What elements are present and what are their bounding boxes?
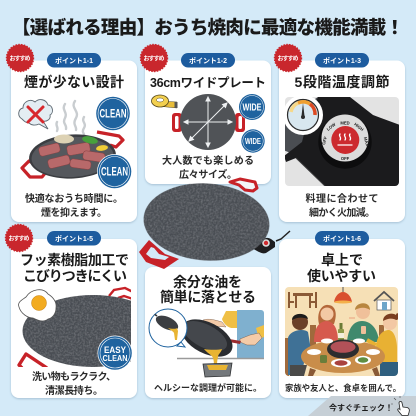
icon: tape measure [152, 95, 178, 108]
heading: temperature: 5段階温度調節 [294, 74, 390, 90]
label: point 1-1 pill [47, 53, 101, 68]
panel: drain excess oil [145, 267, 271, 398]
panel: point 1-3 temperature [279, 60, 405, 222]
body text [32, 370, 116, 397]
heading: drain oil [160, 274, 256, 305]
panel: point 1-2 wide plate [145, 60, 271, 184]
icon: temperature gauge [283, 95, 323, 135]
label: point 1-5 pill [47, 231, 101, 246]
label: point 1-6 pill: ポイント1-6 [323, 235, 361, 243]
chairs behind people [285, 325, 384, 376]
illustration: central grill plate [139, 179, 290, 269]
illustration: people around table [285, 287, 400, 376]
body text [306, 192, 378, 219]
panel: point 1-6 tabletop [279, 239, 405, 398]
icon: easy clean badge: CLEAN [102, 353, 128, 363]
body text: 広々サイズ。 [179, 168, 237, 181]
badge: recommended 1: おすすめ [10, 56, 30, 62]
icon: wide badge bottom: WIDE [245, 136, 261, 146]
panel: point 1-1 low smoke [11, 60, 137, 222]
label: point 1-3 pill: ポイント1-3 [323, 57, 361, 65]
body text: 快適なおうち時間に。 [25, 192, 123, 205]
icon: steam [56, 101, 85, 136]
body text: 煙を抑えます。 [41, 206, 107, 219]
label: point 1-1 pill: ポイント1-1 [55, 57, 93, 65]
icon: no smoke cloud [19, 100, 52, 129]
heading: tabletop: 卓上で [321, 252, 363, 268]
heading: drain oil: 簡単に落とせる [160, 289, 256, 305]
icon: clean badge top: CLEAN [100, 108, 126, 120]
badge: recommended 3 [274, 44, 302, 72]
heading: tabletop: 使いやすい [307, 268, 376, 284]
body text [162, 154, 254, 181]
icon: oil callout bubble [149, 309, 187, 347]
photo: temperature dial: MAX [363, 136, 370, 147]
label: point 1-2 pill: ポイント1-2 [189, 57, 227, 65]
badge: recommended 2 [140, 44, 168, 72]
photo: temperature dial [283, 97, 400, 187]
heading: non-stick: こびりつきにくい [23, 268, 127, 284]
figure: man in green [347, 303, 379, 342]
table with food [301, 323, 385, 376]
photo: temperature dial: HIGH [353, 122, 365, 132]
badge: recommended 2: おすすめ [144, 56, 164, 62]
label: point 1-3 pill [315, 53, 369, 68]
photo: temperature dial: LOW [326, 122, 336, 132]
body text: 大人数でも楽しめる [162, 154, 254, 167]
heading: low smoke: 煙が少ない設計 [24, 74, 124, 90]
label: point 1-5 pill: ポイント1-5 [55, 235, 93, 243]
heading: tabletop [307, 252, 376, 284]
figure: man in blue [288, 314, 310, 376]
icon: hanging lamp [334, 287, 352, 304]
illustration: non-stick plate [17, 286, 131, 367]
icon: easy clean badge: EASY [104, 345, 127, 356]
badge: recommended 5 [6, 224, 32, 252]
icon: clean badge bottom [97, 154, 132, 189]
title: 【選ばれる理由】おうち焼肉に最適な機能満載！ [12, 17, 404, 38]
call to action tab [308, 396, 416, 416]
heading: non-stick [20, 252, 129, 284]
photo: temperature dial: MED [340, 120, 350, 126]
icon: pointing hand [391, 396, 409, 416]
panel: point 1-5 non-stick [10, 239, 138, 400]
figure: woman in yellow [367, 313, 400, 376]
heading: non-stick: フッ素樹脂加工で [20, 252, 129, 268]
icon: wide badge top: WIDE [242, 102, 262, 114]
photo: temperature dial: OFF [341, 156, 350, 161]
photo: temperature dial: OFF [321, 135, 328, 145]
body text: ヘルシーな調理が可能に。 [154, 382, 262, 393]
badge: recommended 5: おすすめ [8, 236, 30, 242]
label: point 1-2 pill [181, 53, 235, 68]
icon: easy clean badge [98, 336, 132, 370]
illustration: pouring oil [175, 310, 264, 377]
body text: 細かく火加減。 [309, 206, 375, 219]
body text: 料理に合わせて [306, 192, 378, 205]
badge: recommended 3: おすすめ [278, 56, 298, 62]
call to action tab: 今すぐチェック！ [329, 402, 393, 412]
icon: clean badge top [96, 96, 130, 131]
icon: clean badge bottom: CLEAN [101, 166, 128, 178]
illustration: grill with meat [22, 132, 123, 181]
icon: table and chairs [288, 292, 317, 308]
heading: wide plate: 36cmワイドプレート [150, 76, 266, 90]
body text: 清潔長持ち。 [45, 384, 103, 397]
heading: drain oil: 余分な油を [173, 274, 242, 290]
icon: house [374, 292, 394, 310]
body text: 洗い物もラクラク、 [32, 370, 116, 383]
figure: woman in red [314, 305, 338, 342]
icon: fried egg [19, 290, 56, 321]
badge: recommended 1 [6, 44, 34, 72]
body text: 家族や友人と、食卓を囲んで。 [285, 383, 401, 393]
body text [25, 192, 123, 219]
label: point 1-6 pill [315, 231, 369, 246]
illustration: plate with arrows [172, 94, 245, 150]
